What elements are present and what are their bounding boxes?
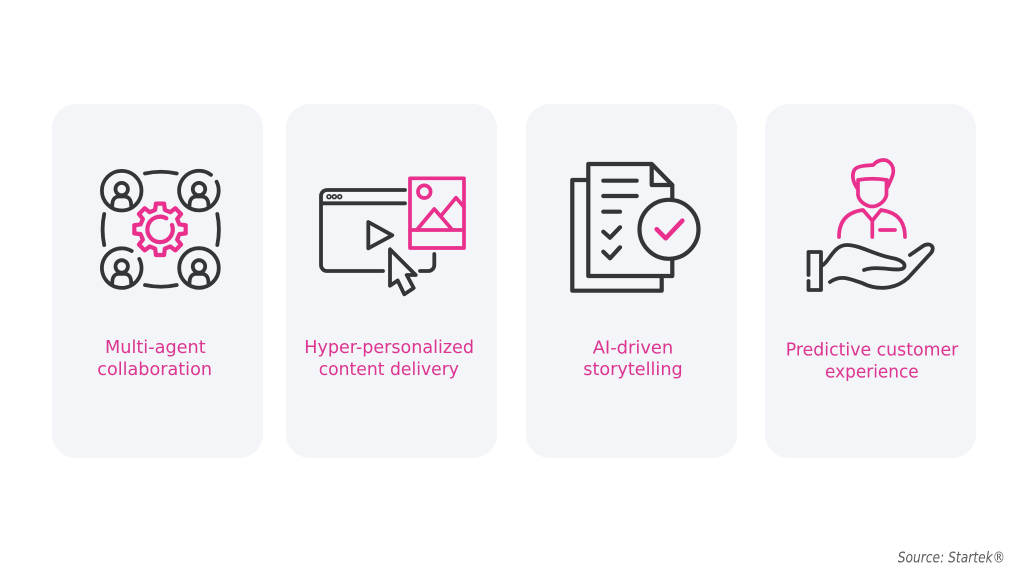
label: Hyper-personalized [304, 337, 474, 358]
check badge [640, 200, 698, 259]
panel: hyper-personalized content delivery [286, 104, 497, 458]
label [583, 337, 683, 380]
panel: predictive customer experience [765, 104, 976, 458]
gear [134, 204, 186, 255]
agent bottom right [179, 248, 219, 288]
label: AI-driven [593, 337, 673, 358]
hand [808, 244, 933, 290]
agent top right [179, 171, 219, 210]
agent top left [102, 171, 142, 210]
person [839, 160, 905, 237]
card background 1 [52, 104, 263, 458]
label: content delivery [319, 359, 459, 380]
text lines [603, 181, 637, 212]
panel: AI-driven storytelling [526, 104, 737, 458]
icon: person over open hand [808, 160, 933, 290]
label: experience [825, 361, 919, 382]
label: collaboration [97, 359, 212, 380]
cursor [390, 249, 416, 294]
label: storytelling [583, 359, 683, 380]
icon: video window, image and cursor [321, 178, 464, 294]
connecting arcs [103, 172, 219, 287]
label [786, 340, 959, 382]
image frame [410, 178, 464, 248]
play triangle [368, 222, 392, 248]
browser window [321, 190, 434, 271]
card background 4 [765, 104, 976, 458]
agent bottom left [102, 248, 142, 288]
icon: agents around a gear [102, 171, 219, 288]
label [97, 337, 212, 380]
card background 3 [526, 104, 737, 458]
label: Predictive customer [786, 340, 959, 360]
label [304, 337, 474, 380]
icon: checklist documents [572, 164, 698, 291]
label: Multi-agent [105, 337, 206, 358]
back page [572, 180, 662, 291]
check marks [603, 227, 620, 258]
card background 2 [286, 104, 497, 458]
panel: multi-agent collaboration [52, 104, 263, 458]
front page [588, 164, 672, 276]
